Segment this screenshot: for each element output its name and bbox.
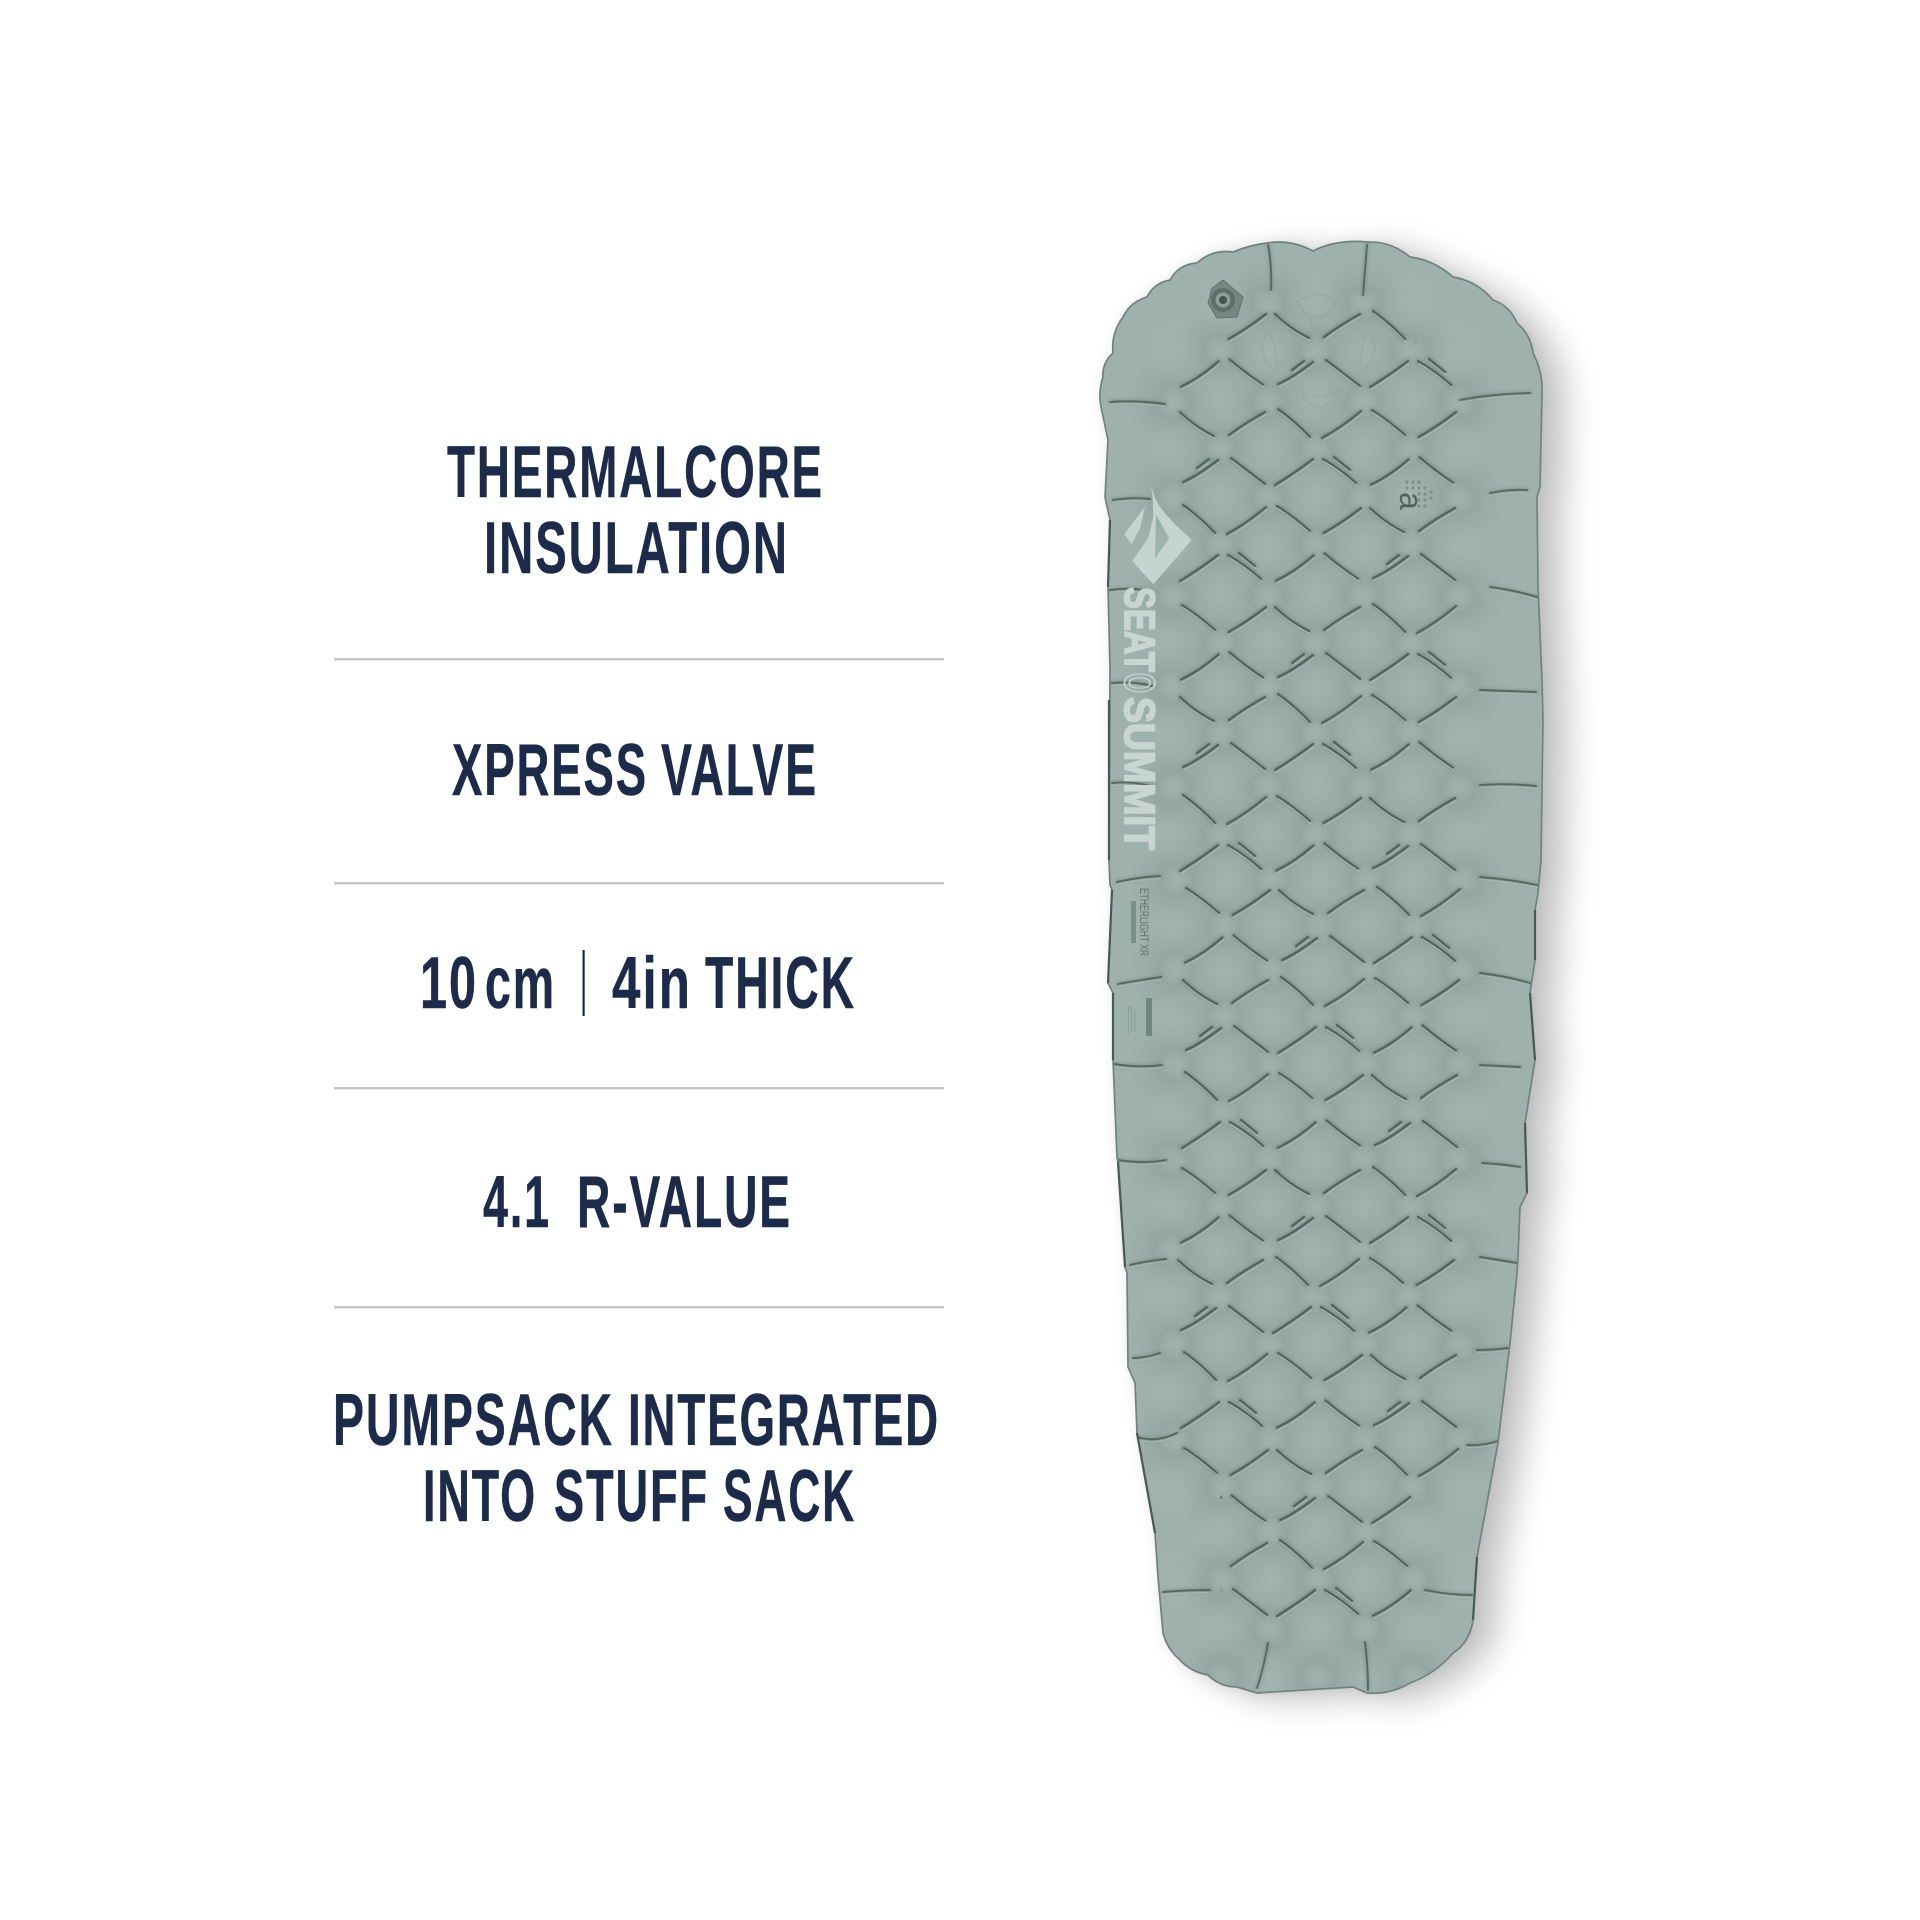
panel: inflated sleeping mat: [1100, 241, 1567, 1723]
icon: small printed a mark: [1393, 480, 1433, 510]
icon: small printed a mark: a: [1393, 492, 1429, 510]
panel: specification list: [333, 432, 944, 1537]
mat outline: [1100, 241, 1543, 1693]
divider 3: [334, 1087, 944, 1090]
product name on mat: ETHERLIGHT XR: [1137, 888, 1149, 956]
heading: Pumpsack integrated into stuff sack: INTEGRATED: [628, 1380, 940, 1461]
mat diamond creases: [1178, 311, 1461, 1619]
brand name on mat: O: [1115, 673, 1163, 693]
heading: thickness: cm: [485, 943, 556, 1024]
printed head outline marks: [1262, 295, 1375, 407]
heading: Xpress valve: XPRESS: [452, 730, 648, 811]
divider 4: [334, 1306, 944, 1308]
heading: Pumpsack integrated into stuff sack: INTO: [423, 1456, 537, 1537]
mat drop shadow: [1100, 241, 1567, 1701]
divider 1: [334, 658, 944, 660]
brand name on mat: [1115, 587, 1163, 850]
heading: R-value: 4.1: [483, 1162, 551, 1243]
mat body: [1100, 241, 1543, 1693]
heading: thickness: [420, 943, 856, 1024]
heading: Thermalcore insulation: INSULATION: [484, 508, 789, 589]
heading: thickness: 4in: [612, 943, 692, 1024]
mat edge pleats: [1110, 245, 1537, 1692]
heading: Xpress valve: VALVE: [661, 730, 818, 811]
product label bar: [1131, 901, 1136, 943]
heading: Thermalcore insulation: THERMALCORE: [447, 432, 824, 513]
heading: R-value: R-VALUE: [577, 1162, 792, 1243]
heading: Pumpsack integrated into stuff sack: PUMPSACK: [333, 1380, 614, 1461]
heading: R-value: [483, 1162, 792, 1243]
brand name on mat: SEAT: [1115, 587, 1163, 672]
heading: Pumpsack integrated into stuff sack: [333, 1380, 940, 1537]
heading: thickness: THICK: [705, 943, 856, 1024]
brand name on mat: SUMMIT: [1115, 697, 1163, 850]
heading: Pumpsack integrated into stuff sack: STUFF: [554, 1456, 709, 1537]
care label tag: [1128, 998, 1152, 1036]
mat cushion shading: [1148, 281, 1486, 1690]
heading: Pumpsack integrated into stuff sack: SACK: [723, 1456, 856, 1537]
icon: air valve: [1208, 280, 1243, 318]
icon: brand flag logo: [1124, 483, 1192, 584]
heading: Thermalcore insulation: [447, 432, 824, 589]
heading: thickness: 10: [420, 943, 478, 1024]
divider 2: [334, 882, 944, 884]
